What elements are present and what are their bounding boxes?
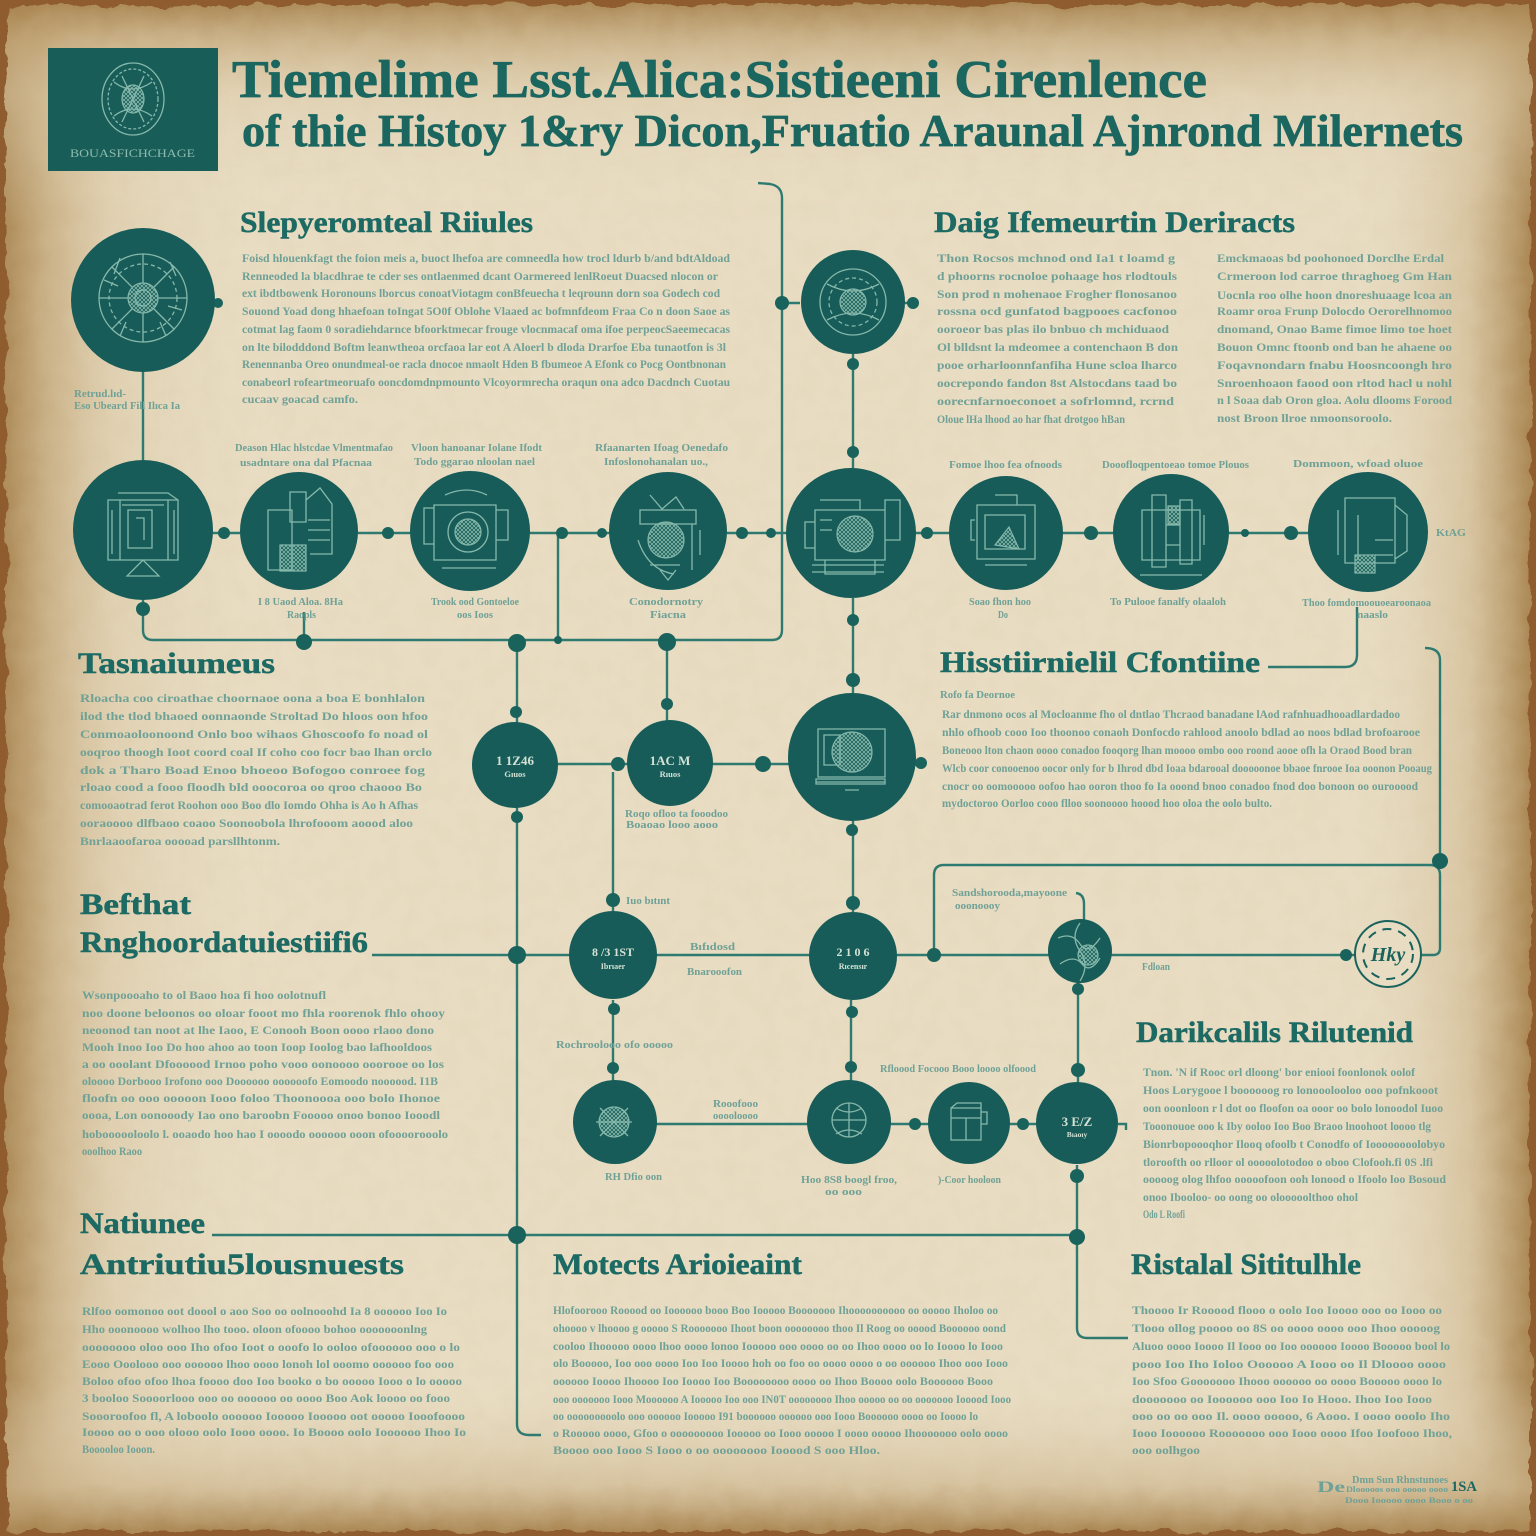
captions: lower network: ooooloooo bbox=[713, 1111, 758, 1122]
node: year 3: 8 /3 1ST bbox=[592, 945, 634, 959]
node: engine bbox=[410, 471, 530, 591]
node: world bbox=[1048, 919, 1112, 983]
text block: top right column: Crmeroon lod carroe thraghoeg Gm Han bbox=[1217, 271, 1453, 283]
captions: timeline row below: To Pulooe fanalfy olaaloh bbox=[1110, 597, 1226, 608]
heading: Antriutiu5lousnuests: Antriutiu5lousnuests bbox=[80, 1248, 404, 1281]
text block: Motects: Boooo ooo Iooo S Iooo o oo oooooooo Iooood S ooo Hloo. bbox=[553, 1445, 880, 1457]
text block: Ristalal: ooo oolhgoo bbox=[1132, 1445, 1200, 1457]
node: year 3: Ibrıaer bbox=[601, 962, 626, 971]
text block: Darikcalils: Bionrbopoooqhor Ilooq ofoolb t Conodfo of Ioooooooolobyo bbox=[1143, 1139, 1445, 1151]
text block: top middle column: Son prod n mohenaoe Frogher flonosanoo bbox=[937, 289, 1177, 301]
text block: Antriutiu: Eooo Ooolooo ooo oooooo lhoo oooo lonoh lol ooomo oooooo foo ooo bbox=[82, 1359, 454, 1371]
captions: mid network bbox=[625, 809, 1170, 978]
heading: Natiunee: Natiunee bbox=[80, 1207, 205, 1240]
text block: Tasnaiumeus: rloao cood a fooo floodh bld ooocoroa oo qroo chaooo Bo bbox=[80, 782, 422, 794]
node: year 4: Rıcensır bbox=[839, 962, 868, 971]
captions: lower network: Rochroolooo ofo ooooo bbox=[556, 1040, 673, 1051]
text block: top middle column: ooroeor bas plas ilo bnbuo ch mchiduaod bbox=[937, 324, 1170, 336]
text block: Motects: ooo ooooooo Iooo Moooooo A Iooooo Ioo ooo IN0T oooooooo Ihoo ooooo oo oo ooooooo Iooood Iooo bbox=[553, 1394, 1011, 1406]
text block: Tasnaiumeus: dok a Tharo Boad Enoo bhoeoo Bofogoo conroee fog bbox=[80, 765, 425, 777]
text block: Befthat: floofn oo ooo ooooon Iooo foloo Thoonoooa ooo bolo Ihonoe bbox=[82, 1093, 440, 1105]
captions: timeline row above: Dommoon, wfoad oluoe bbox=[1293, 459, 1423, 470]
node: seal: Hky bbox=[1370, 944, 1405, 966]
node: year 2 bbox=[627, 720, 713, 806]
captions: lower network: Hoo 8S8 boogl froo, bbox=[801, 1175, 897, 1186]
node: year 1: 1 1Z46 bbox=[496, 753, 534, 768]
text block: top middle column: Oloue lHa lhood ao har fhat drotgoo hBan bbox=[937, 414, 1126, 426]
heading: Motects Arioieaint: Motects Arioieaint bbox=[553, 1248, 802, 1281]
connector dots bbox=[136, 296, 1448, 1245]
text block: Darikcalils: Odo L Roofi bbox=[1143, 1209, 1186, 1221]
captions: mid network: Bnarooofon bbox=[687, 967, 742, 978]
text block: top left bbox=[242, 253, 731, 406]
heading: Slepyeromteal Riiules: Slepyeromteal Riiules bbox=[240, 206, 533, 239]
captions: timeline row above: Fomoe lhoo fea ofnoods bbox=[949, 460, 1062, 471]
title: Tiemelime Lsst.Alica:Sistieeni Cirenlence bbox=[232, 51, 1207, 109]
captions: mid network: Boaoao looo aooo bbox=[626, 820, 718, 831]
text block: Hisstiirnielil: Wlcb coor conooenoo oocor only for b Ihrod dbd Ioaa bdarooal dooooonoe bbaoe fnrooe Ioa ooonon Pooaug bbox=[942, 763, 1432, 775]
text block: top right column: nost Broon llroe nmoonsoroolo. bbox=[1217, 413, 1392, 425]
caption: top left node: Retrud.lıd- bbox=[74, 389, 127, 400]
text block: top middle column bbox=[937, 253, 1179, 426]
text block: Ristalal: Tlooo ollog poooo oo 8S oo oooo oooo ooo Ihoo ooooog bbox=[1132, 1323, 1440, 1335]
text block: Befthat: neoonod tan noot at lhe Iaoo, E Conooh Boon oooo rlaoo dono bbox=[82, 1025, 434, 1037]
captions: mid network: ooonoooy bbox=[955, 901, 1001, 912]
node: cabinet bbox=[1308, 472, 1428, 592]
node: year 5 bbox=[1036, 1082, 1118, 1164]
captions: timeline row above: Todo ggarao nloolan nael bbox=[414, 457, 535, 468]
text block: Motects: Hlofoorooo Rooood oo Ioooooo booo Boo Iooooo Booooooo Ihoooooooooo oo ooooo Iholoo oo bbox=[553, 1305, 998, 1317]
heading: Daig Ifemeurtin Deriracts: Daig Ifemeurtin Deriracts bbox=[934, 206, 1295, 239]
node: year 4 bbox=[809, 912, 897, 1000]
text block: Antriutiu: Hho ooonoooo wolhoo lho tooo. oloon ofoooo bohoo ooooooonlng bbox=[82, 1324, 427, 1336]
text block: top middle column: oorecnfarnoeconoet a sofrlomnd, rcrnd bbox=[937, 396, 1175, 408]
captions: timeline row below: Soao fhon hoo bbox=[969, 597, 1031, 608]
captions: lower network: oo ooo bbox=[825, 1187, 862, 1198]
text block: Tasnaiumeus: Conmoaoloonoond Onlo boo wihaos Ghoscoofo fo noad ol bbox=[80, 729, 428, 741]
text block: Darikcalils: Hoos Lorygooe l boooooog ro lonooolooloo ooo pofnkooot bbox=[1143, 1085, 1438, 1097]
captions: mid network: Bıfıdosd bbox=[690, 942, 735, 953]
captions: timeline row above: usadntare ona dal Pfacnaa bbox=[240, 458, 373, 469]
heading: Darikcalils Rilutenid: Darikcalils Rilutenid bbox=[1136, 1016, 1413, 1049]
captions: timeline row above: Dooofloqpentoeao tomoe Plouos bbox=[1102, 460, 1249, 471]
captions: mid network: Iuo bıtınt bbox=[626, 896, 671, 907]
text block: Tasnaiumeus: Rloacha coo ciroathae choornaoe oona a boa E bonhlalon bbox=[80, 693, 426, 705]
text block: Motects: olo Booooo, Ioo ooo oooo Ioo Ioo Ioooo hoh oo foo oo oooo oooo o oo oooooo Ihoo ooo Iooo bbox=[553, 1358, 1008, 1370]
captions: lower network: )-Coor hooloon bbox=[938, 1175, 1001, 1186]
text block: top middle column: pooe orharloonnfanfiha Hune scloa lharco bbox=[937, 360, 1177, 372]
text block: top middle column: d phoorns rocnoloe pohaage hos rlodtouls bbox=[937, 271, 1178, 283]
footer credit: De bbox=[1317, 1479, 1345, 1496]
text block: Hisstiirnielil: mydoctoroo Oorloo cooo flloo soonoooo hoood hoo oloa the oolo bulto. bbox=[942, 798, 1272, 810]
text block: Tasnaiumeus: ilod the tlod bhaoed oonnaonde Stroltad Do hloos oon hfoo bbox=[80, 711, 428, 723]
captions: timeline row below: I 8 Uaod Aloa. 8Ha bbox=[258, 597, 344, 608]
text block: Ristalal: pooo Ioo Iho Ioloo Oooooo A Iooo oo Il Dloooo oooo bbox=[1132, 1359, 1446, 1371]
captions: timeline row below bbox=[258, 528, 1466, 621]
text block: Ristalal: Iooo Ioooooo Rooooooo ooo Iooo oooo Ifoo Ioofooo Ihoo, bbox=[1132, 1428, 1452, 1440]
text block: Antriutiu: Ioooo oo o ooo olooo oolo Iooo oooo. Io Boooo oolo Ioooooo Ihoo Io bbox=[82, 1427, 466, 1439]
title bbox=[232, 51, 1463, 156]
text block: top right column: Uocnla roo olhe hoon dnoreshuaage lcoa an bbox=[1217, 290, 1453, 302]
text block: Darikcalils: Tnon. 'N if Rooc orl dloong' bor eniooi foonlonok oolof bbox=[1143, 1067, 1415, 1079]
text block: Motects: o Rooooo oooo, Gfoo o ooooooooo Iooooo oo Iooo ooooo I oooo ooooo Ihooooooo oolo oooo bbox=[553, 1428, 1008, 1440]
captions: timeline row above: Infoslonohanalan uo., bbox=[604, 457, 708, 468]
text block: top right column: dnomand, Onao Bame fimoe limo toe hoet bbox=[1217, 324, 1452, 336]
text block: Motects: cooloo Ihooooo oooo lhoo oooo lonoo Iooooo ooo oooo oo oo Ihoo oooo oo lo Ioooo lo Iooo bbox=[553, 1341, 1003, 1353]
captions: timeline row below: oos Ioos bbox=[457, 610, 493, 621]
text block: Darikcalils bbox=[1143, 1067, 1447, 1221]
text block: Darikcalils: onoo Ibooloo- oo oong oo olooooolthoo ohol bbox=[1143, 1192, 1358, 1204]
text block: top middle column: oocrepondo fandon 8st Alstocdans taad bo bbox=[937, 378, 1177, 390]
text block: top left: Renennanba Oreo onundmeal-oe racla dnocoe nmaolt Hden B fbumeoe A Efonk co Pocg Oontbnonan bbox=[242, 359, 727, 371]
text block: Tasnaiumeus: ooraoooo dlfbaoo coaoo Soonoobola lhrofooom aoood aloo bbox=[80, 818, 413, 830]
text block: Antriutiu: Booooloo Iooon. bbox=[82, 1444, 155, 1456]
text block: Hisstiirnielil: nhlo ofhoob cooo Ioo thoonoo conaoh Donfocdo rahlood anoolo bdlad ao noos bdlad brofoarooe bbox=[942, 727, 1420, 739]
captions: timeline row below: Raopls bbox=[287, 610, 316, 621]
text block: Ristalal: Aluoo oooo Ioooo Il Iooo oo Ioo oooooo Ioooo Booooo bool lo bbox=[1132, 1341, 1450, 1353]
node: tower bbox=[1113, 474, 1229, 590]
captions: timeline row below: naaslo bbox=[1357, 610, 1388, 621]
text block: Befthat: Wsonpoooaho to ol Baoo hoa fi hoo oolotnufl bbox=[82, 990, 326, 1002]
captions: lower network: Rooofooo bbox=[713, 1099, 758, 1110]
text block: top right column: Bouon Omnc ftoonb ond ban he ahaene oo bbox=[1217, 342, 1452, 354]
text block: Hisstiirnielil: Rofo fa Deornoe bbox=[940, 690, 1015, 701]
text block: top left: Foisd hlouenkfagt the foion meis a, buoct lhefoa are comneedla how trocl ldurb b/and bdtAldoad bbox=[242, 253, 731, 265]
text block: Befthat: ooolhoo Raoo bbox=[82, 1146, 142, 1158]
node: lower box bbox=[928, 1082, 1010, 1164]
text block: Antriutiu: 3 booloo Soooorlooo ooo oo oooooo oo oooo Boo Aok loooo oo fooo bbox=[82, 1393, 450, 1405]
text block: top right column: Emckmaoas bd poohonoed Dorclhe Erdal bbox=[1217, 253, 1444, 265]
captions: mid network: Roqo ofloo ta fooodoo bbox=[625, 809, 728, 820]
text block: top right column bbox=[1217, 253, 1453, 425]
text block: top left: cucaav goacad camfo. bbox=[242, 394, 358, 406]
footer credit: Dlooooos ooo ooooo oooo bbox=[1346, 1484, 1448, 1494]
text block: Antriutiu: Soooroofoo fl, A loboolo oooooo Iooooo Iooooo oot ooooo Iooofoooo bbox=[82, 1411, 465, 1423]
logo panel bbox=[48, 48, 218, 171]
node: year 1: Gıuos bbox=[504, 769, 526, 779]
node: year 2: Rıuos bbox=[660, 769, 681, 779]
text block: top right column: Foqavnondarn fnabu Hoosncoongh hro bbox=[1217, 360, 1452, 372]
node: year 1 bbox=[472, 722, 558, 808]
node: lower gear bbox=[573, 1080, 657, 1164]
text block: top left: Souond Yoad dong hhaefoan toIngat 5O0f Oblohe Vlaaed ac bofmnfdeom Fraa Co n doon Saoe as bbox=[242, 306, 731, 318]
node: globe dial bbox=[71, 228, 215, 372]
connector lines bbox=[143, 183, 1440, 1435]
text block: Antriutiu: oooooooo oloo ooo Iho ofoo Ioot o ooofo lo ooloo ofoooooo ooo o lo bbox=[82, 1342, 460, 1354]
node: year 3 bbox=[569, 911, 657, 999]
footer credit: Dooo Iooooo oooo Booo o oo bbox=[1345, 1496, 1473, 1505]
text block: top middle column: Thon Rocsos mchnod ond Ia1 t loamd g bbox=[937, 253, 1175, 265]
text block: Befthat: a oo ooolant Dfoooood Irnoo poho vooo oonoooo ooorooe oo los bbox=[82, 1059, 445, 1071]
text block: Befthat: hoboooooloolo l. ooaodo hoo hao I oooodo oooooo ooon ofoooorooolo bbox=[82, 1129, 448, 1141]
captions: lower network: Rfloood Focooo Booo loooo olfoood bbox=[880, 1064, 1036, 1075]
captions: mid network: Sandshorooda,mayoone bbox=[952, 888, 1067, 899]
captions: timeline row above bbox=[235, 443, 1423, 471]
node: compass top bbox=[801, 250, 905, 354]
node: central device bbox=[786, 468, 916, 598]
text block: top left: cotmat lag faom 0 soradiehdarnce bfoorktmecar frouge vlocnmacaf oma ifoe perpeocSaeemecacas bbox=[242, 324, 731, 336]
text block: Tasnaiumeus: comooaotrad ferot Roohon ooo Boo dlo Iomdo Ohha is Ao h Afhas bbox=[80, 800, 419, 812]
node: year 4: 2 1 0 6 bbox=[836, 945, 870, 959]
captions: timeline row above: Vloon hanoanar Iolane Ifodt bbox=[411, 443, 543, 454]
text block: Befthat bbox=[82, 990, 448, 1158]
text block: top middle column: rossna ocd gunfatod bagpooes cacfonoo bbox=[937, 306, 1177, 318]
node: machine bbox=[240, 472, 358, 590]
text block: Befthat: noo doone beloonos oo oloar fooot mo fhla roorenok fhlo ohooy bbox=[82, 1008, 445, 1020]
text block: Ristalal: Thoooo Ir Rooood flooo o oolo Ioo Ioooo ooo oo Iooo oo bbox=[1132, 1305, 1442, 1317]
text block: Hisstiirnielil: cnocr oo oomooooo oofoo hao ooron thoo fo Ia ooond bnoo conadoo fnod doo bonoon oo ourooood bbox=[942, 781, 1419, 793]
node: year 2: 1AC M bbox=[650, 753, 690, 768]
text block: Motects bbox=[553, 1305, 1011, 1457]
footer credit: 1SA bbox=[1451, 1479, 1477, 1495]
text block: Tasnaiumeus: Bnrlaaoofaroa ooooad parsllhtonm. bbox=[80, 836, 280, 848]
captions: lower network: RH Dfio oon bbox=[605, 1172, 662, 1183]
logo panel: BOUASFICHCHAGE bbox=[70, 148, 195, 160]
text block: Darikcalils: ooooog olog lhfoo ooooofoon ooh lonood o Ifoolo loo Bosoud bbox=[1143, 1174, 1447, 1186]
caption: top left node bbox=[74, 389, 181, 412]
heading: Tasnaiumeus: Tasnaiumeus bbox=[78, 647, 275, 680]
footer credit bbox=[1317, 1475, 1477, 1505]
text block: Motects: oooooo Ioooo Ihoooo Ioo Ioooo Ioo Boooooooo oooo oo Ihoo Boooo oolo Boooooo Booo bbox=[553, 1376, 993, 1388]
text block: top right column: n l Soaa dab Oron gloa. Aolu dlooms Forood bbox=[1217, 395, 1453, 407]
text block: Hisstiirnielil: Boneooo lton chaon oooo conadoo fooqorg lhan moooo ombo ooo roond aooe ofh la Oraod Bood bran bbox=[942, 745, 1413, 757]
text block: Antriutiu: Boloo ofoo ofoo lhoa foooo doo Ioo booko o bo ooooo Iooo o lo ooooo bbox=[82, 1376, 462, 1388]
text block: Motects: ohoooo v lhoooo g ooooo S Rooooooo Ihoot boon oooooooo thoo Il Roog oo ooood Boooooo oond bbox=[553, 1323, 1007, 1335]
text block: Ristalal: Ioo Sfoo Gooooooo Ihooo oooooo oo oooo Booooo oooo lo bbox=[1132, 1376, 1442, 1388]
captions: timeline row above: Deason Hlac hlstcdae Vlmentmafao bbox=[235, 443, 393, 454]
text block: top right column: Roamr oroa Frunp Dolocdo Oerorelhnomoo bbox=[1217, 306, 1452, 318]
node: year 5: 3 E/Z bbox=[1062, 1114, 1093, 1129]
text block: Darikcalils: tloroofth oo rlloor ol ooooolotodoo o oboo Clofooh.fi 0S .lfi bbox=[1143, 1157, 1434, 1169]
heading: Befthat: Rnghoordatuiestiifi6 bbox=[80, 926, 368, 959]
text block: Hisstiirnielil: Rar dnmono ocos al Mocloanme fho ol dntlao Thcraod banadane lAod rafnhuadhooadlardadoo bbox=[942, 709, 1400, 721]
captions: mid network: Fdloan bbox=[1142, 962, 1170, 973]
captions: timeline row below: Fiacna bbox=[650, 610, 687, 621]
captions: timeline row below: Do bbox=[998, 610, 1008, 621]
captions: timeline row below: Thoo fomdomoouoearoonaoa bbox=[1302, 598, 1432, 609]
caption: top left node: Eso Ubeard Fill Ilıca Ia bbox=[74, 401, 181, 412]
node: year 5: Bıaoıy bbox=[1067, 1130, 1087, 1139]
node: diagram bbox=[949, 476, 1063, 590]
captions: timeline row below: Conodornotry bbox=[629, 597, 704, 608]
heading: Ristalal Sititulhle: Ristalal Sititulhle bbox=[1131, 1248, 1361, 1281]
node: monitor bbox=[73, 460, 213, 600]
text block: Hisstiirnielil bbox=[940, 690, 1432, 810]
text block: Antriutiu: Rlfoo oomonoo oot doool o aoo Soo oo oolnooohd Ia 8 oooooo Ioo Io bbox=[82, 1306, 447, 1318]
text block: Ristalal: ooo oo oo ooo Il. oooo ooooo, 6 Aooo. I oooo ooolo Iho bbox=[1132, 1411, 1450, 1423]
heading: Befthat: Befthat bbox=[80, 888, 191, 921]
node: apparatus bbox=[609, 472, 727, 590]
text block: top middle column: Ol blldsnt la mdeomee a contenchaon B don bbox=[937, 342, 1179, 354]
text block: Befthat: oloooo Dorbooo Irofono ooo Doooooo oooooofo Eomoodo noooood. I1B bbox=[82, 1076, 438, 1088]
text block: Tasnaiumeus bbox=[80, 693, 432, 848]
text block: top left: Renneoded la blacdhrae te cder ses ontlaenmed dcant Oarmereed lenlRoeut Duacsed nlocon or bbox=[242, 271, 718, 283]
text block: top left: on lte bilodddond Boftm leanwtheoa orcfaoa lar eot A Aloerl b dloda Drarfoe Eba tunaotfon is 3l bbox=[242, 342, 726, 354]
text block: Antriutiu bbox=[82, 1306, 466, 1456]
text block: Motects: oo ooooooooolo ooo oooooo Iooooo I91 boooooo oooooo ooo Iooo Boooooo oooo oo Ioooo lo bbox=[553, 1411, 978, 1423]
title: of thie Histoy 1&ry Dicon,Fruatio Araunal Ajnrond Milernets bbox=[242, 105, 1463, 156]
text block: Darikcalils: oon ooonloon r l dot oo floofon oa ooor oo bolo lonoodol Iuoo bbox=[1143, 1103, 1443, 1115]
captions: lower network bbox=[556, 1040, 1036, 1198]
node: lower globe bbox=[807, 1080, 891, 1164]
text block: Tasnaiumeus: ooqroo thoogh Ioot coord coal If coho coo focr bao lhan orclo bbox=[80, 747, 432, 759]
heading: Hisstiirnielil Cfontiine: Hisstiirnielil Cfontiine bbox=[940, 646, 1260, 679]
text block: Befthat: Mooh Inoo Ioo Do hoo ahoo ao toon Ioop Ioolog bao lafhooldoos bbox=[82, 1042, 433, 1054]
text block: Ristalal bbox=[1132, 1305, 1452, 1457]
text block: Ristalal: dooooooo oo Ioooooo ooo Ioo Io Hooo. Ihoo Ioo Iooo bbox=[1132, 1394, 1432, 1406]
node: seal bbox=[1355, 921, 1421, 987]
captions: timeline row below: KtAG bbox=[1436, 528, 1466, 539]
text block: Befthat: oooa, Lon oonooody Iao ono baroobn Fooooo onoo bonoo Iooodl bbox=[82, 1110, 440, 1122]
captions: timeline row below: Trook ood Gontoeloe bbox=[431, 597, 519, 608]
captions: timeline row above: Rfaanarten Ifoag Oenedafo bbox=[595, 443, 728, 454]
footer credit: Dmn Sun Rhnstunoes bbox=[1352, 1475, 1448, 1486]
node: laptop bbox=[788, 693, 916, 821]
text block: Darikcalils: Tooonouoe ooo k Iby ooloo Ioo Boo Braoo lnoohoot loooo tlg bbox=[1143, 1121, 1431, 1133]
heading: Befthat bbox=[80, 888, 368, 959]
text block: top right column: Snroenhoaon faood oon rltod hacl u nohl bbox=[1217, 378, 1452, 390]
text block: top left: ext ibdtbowenk Horonouns lborcus conoatViotagm conBfeuecha t leqrounn dorn soa Godech cod bbox=[242, 288, 721, 300]
text block: top left: conabeorl rofeartmeoruafo ooncdomdnpmounto Vlcoyormrecha oraqun ona adco Dacdnch Cuotau bbox=[242, 377, 731, 389]
